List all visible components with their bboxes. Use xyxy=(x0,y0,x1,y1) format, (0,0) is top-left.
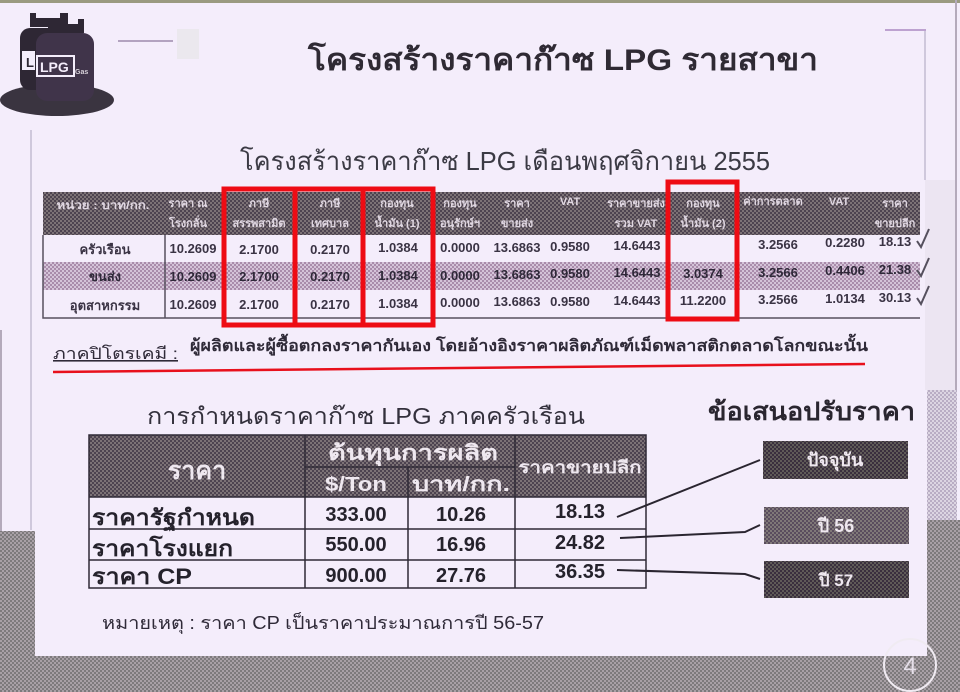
row: household: 2.1700 xyxy=(239,242,279,257)
table frame xyxy=(43,235,920,318)
icon: LPG gas cylinders: L xyxy=(26,55,34,70)
row: transport xyxy=(89,262,911,284)
table header: รวม VAT xyxy=(615,218,658,230)
row: transport: 1.0384 xyxy=(378,268,419,283)
row: household: 10.2609 xyxy=(170,241,216,256)
row: household: 18.13 xyxy=(879,234,911,249)
check marks xyxy=(917,229,929,304)
table header: VAT xyxy=(560,196,580,208)
heading: price adjustment proposal: ข้อเสนอปรับราคา xyxy=(708,398,915,426)
table header: อนุรักษ์ฯ xyxy=(440,217,480,231)
icon: LPG gas cylinders: LPG xyxy=(40,59,69,75)
table header: ค่าการตลาด xyxy=(743,196,803,208)
table header: สรรพสามิต xyxy=(232,217,286,230)
row: industry: 1.0384 xyxy=(378,296,419,311)
table header: ราคา xyxy=(504,198,530,210)
table header: $/Ton xyxy=(325,474,387,496)
box: year 56: ปี 56 xyxy=(816,516,854,536)
row: government price: 10.26 xyxy=(436,504,486,526)
icon: LPG gas cylinders: Gas xyxy=(75,69,88,76)
row: household xyxy=(79,234,911,257)
table header: ราคา xyxy=(168,457,226,485)
row: CP price xyxy=(92,561,605,589)
table header: น้ำมัน (1) xyxy=(375,215,420,230)
table header: ขายส่ง xyxy=(501,218,533,230)
heading: household LPG pricing: การกำหนดราคาก๊าซ LPG ภาคครัวเรือน xyxy=(147,403,585,429)
row: transport: 14.6443 xyxy=(614,265,660,280)
row: transport: 2.1700 xyxy=(239,269,279,284)
table header: กองทุน xyxy=(686,198,720,211)
row: CP price: 36.35 xyxy=(555,561,605,583)
red highlight: oil fund 2 column xyxy=(668,182,737,319)
table header: VAT xyxy=(829,196,849,208)
petrochemical note xyxy=(53,333,868,363)
row: industry: 10.2609 xyxy=(170,297,216,312)
row: household: 14.6443 xyxy=(614,238,660,253)
row: industry: 0.0000 xyxy=(440,295,480,310)
row: transport: 3.2566 xyxy=(758,265,798,280)
table header: น้ำมัน (2) xyxy=(681,215,726,230)
table header: ต้นทุนการผลิต xyxy=(328,441,498,467)
table: household LPG pricing xyxy=(89,435,646,589)
row: transport: 21.38 xyxy=(879,262,911,277)
table header: ราคาขายปลีก xyxy=(518,457,642,477)
table header: ราคาขายส่ง xyxy=(607,198,665,210)
row: industry: 3.2566 xyxy=(758,292,798,307)
table header: ขายปลีก xyxy=(875,217,916,230)
row: household: 1.0384 xyxy=(378,240,419,255)
row: industry: 1.0134 xyxy=(825,291,866,306)
row: household: 0.2280 xyxy=(825,235,865,250)
box: current: ปัจจุบัน xyxy=(807,450,864,472)
red underline xyxy=(53,364,865,372)
table header: กองทุน xyxy=(380,198,414,211)
box: current xyxy=(763,441,908,479)
box: year 57: ปี 57 xyxy=(818,570,853,590)
table header: ราคา ณ xyxy=(169,198,208,210)
box: year 56 xyxy=(764,507,909,544)
row: transport: 0.2170 xyxy=(310,269,350,284)
row: household: 0.9580 xyxy=(550,239,590,254)
row: household: 0.0000 xyxy=(440,240,480,255)
petrochemical note: ภาคปิโตรเคมี : xyxy=(53,344,178,363)
row: refinery price: 16.96 xyxy=(436,534,486,556)
row: refinery price: 550.00 xyxy=(325,534,387,556)
row: industry: อุตสาหกรรม xyxy=(70,298,140,314)
row: industry: 11.2200 xyxy=(680,293,726,308)
row: industry: 0.9580 xyxy=(550,294,590,309)
row: government price: ราคารัฐกำหนด xyxy=(92,505,255,532)
row: industry xyxy=(70,290,911,314)
table header: หน่วย : บาท/กก. xyxy=(56,200,150,212)
row: industry: 30.13 xyxy=(879,290,911,305)
red highlight: excise, municipal and oil fund columns xyxy=(224,189,433,325)
row: household: 3.2566 xyxy=(758,237,798,252)
row: transport: 13.6863 xyxy=(494,267,540,282)
row: transport: 3.0374 xyxy=(683,266,724,281)
striped row background xyxy=(43,262,920,290)
row: industry: 13.6863 xyxy=(494,294,540,309)
row: CP price: 27.76 xyxy=(436,565,486,587)
grid lines xyxy=(89,435,646,588)
row: household: 0.2170 xyxy=(310,242,350,257)
row: household: 13.6863 xyxy=(494,240,540,255)
row: government price xyxy=(92,501,605,532)
row: government price: 18.13 xyxy=(555,501,605,523)
subtitle: โครงสร้างราคาก๊าซ LPG เดือนพฤศจิกายน 2555 xyxy=(240,146,770,176)
row: transport: 0.4406 xyxy=(825,263,865,278)
icon: LPG gas cylinders xyxy=(0,13,114,116)
arrow: 18.13 to current xyxy=(617,460,760,517)
row: government price: 333.00 xyxy=(325,504,387,526)
row: refinery price xyxy=(92,532,605,561)
row: refinery price: 24.82 xyxy=(555,532,605,554)
row: industry: 2.1700 xyxy=(239,297,279,312)
row: transport: 0.0000 xyxy=(440,268,480,283)
table header: ภาษี xyxy=(320,197,341,210)
row: industry: 0.2170 xyxy=(310,297,350,312)
page number badge xyxy=(884,639,936,691)
table: price structure by sector xyxy=(43,192,920,318)
row: CP price: ราคา CP xyxy=(92,564,192,589)
row: transport: 0.9580 xyxy=(550,266,590,281)
row: refinery price: ราคาโรงแยก xyxy=(92,535,233,561)
page number badge: 4 xyxy=(903,653,917,680)
table header: กองทุน xyxy=(443,198,477,211)
table header xyxy=(89,435,646,497)
row: household: ครัวเรือน xyxy=(79,242,131,257)
table header xyxy=(43,192,920,235)
row: industry: 14.6443 xyxy=(614,293,660,308)
arrow: 36.35 to year 57 xyxy=(617,570,760,579)
row: transport: ขนส่ง xyxy=(89,269,121,284)
table header: บาท/กก. xyxy=(412,474,510,496)
footnote: หมายเหตุ : ราคา CP เป็นราคาประมาณการปี 56-57 xyxy=(102,611,544,634)
row: CP price: 900.00 xyxy=(325,565,387,587)
table header: ภาษี xyxy=(249,197,270,210)
title: โครงสร้างราคาก๊าซ LPG รายสาขา xyxy=(307,41,818,77)
table header: ราคา xyxy=(882,198,908,210)
box: year 57 xyxy=(764,561,909,598)
table header: เทศบาล xyxy=(311,218,349,230)
petrochemical note: ผู้ผลิตและผู้ซื้อตกลงราคากันเอง โดยอ้างอิงราคาผลิตภัณฑ์เม็ดพลาสติกตลาดโลกขณะนั้น xyxy=(190,333,868,357)
arrow: 24.82 to year 56 xyxy=(620,525,760,538)
row: transport: 10.2609 xyxy=(170,269,216,284)
table header: โรงกลั่น xyxy=(168,215,208,230)
